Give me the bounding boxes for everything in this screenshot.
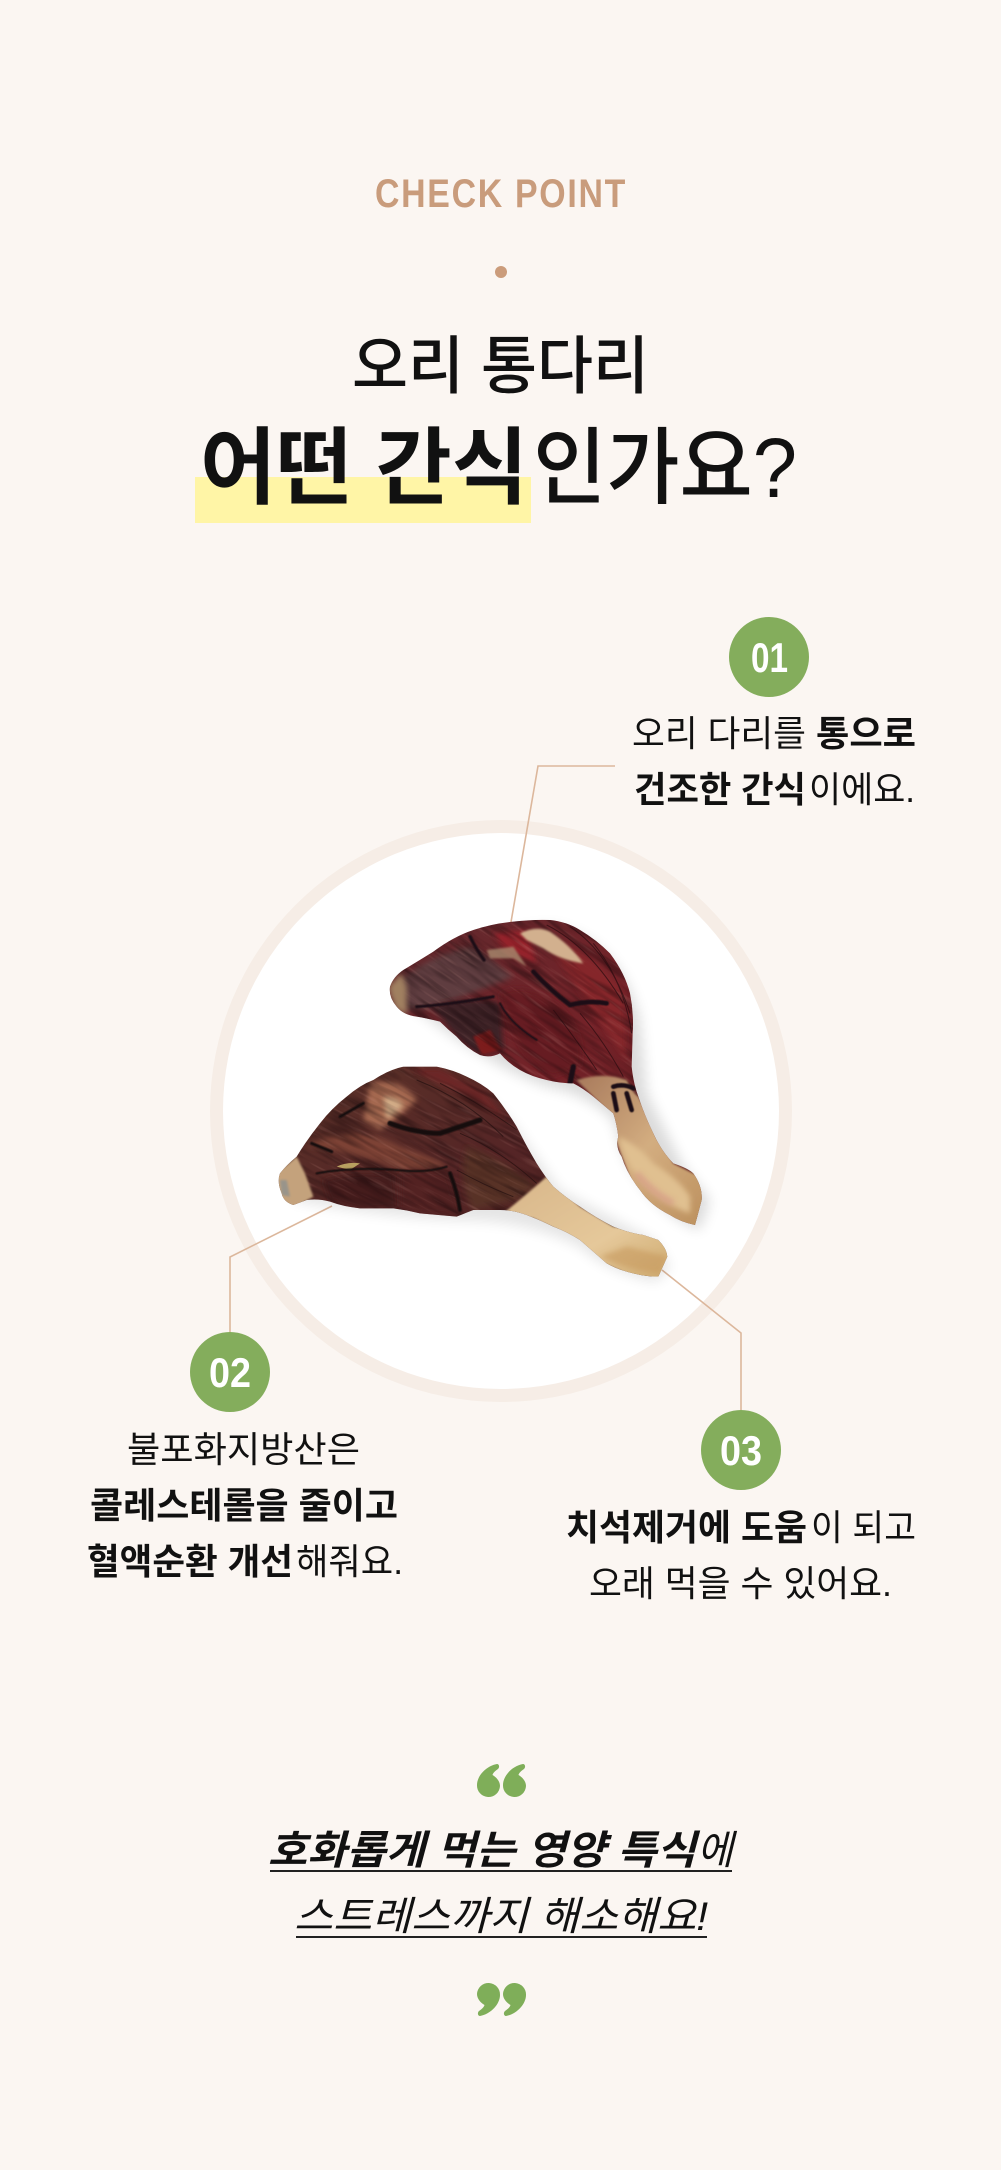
badge 03 (701, 1410, 781, 1490)
callout 03 text: 이 되고 (811, 1507, 916, 1548)
upper leg bone (577, 1076, 707, 1230)
icon: closing quote mark (477, 1983, 526, 2016)
callout 03 (566, 1410, 916, 1604)
header: check point (375, 172, 627, 278)
dark cracks and fibres (312, 1103, 480, 1210)
upper duck leg (390, 920, 702, 1225)
dark lower lobe (430, 1000, 503, 1055)
fat streak (520, 929, 583, 963)
leader lines (230, 766, 741, 1410)
quote line 2: 스트레스까지 해소해요! (294, 1895, 708, 1939)
callout 02 text: 불포화지방산은 (127, 1429, 360, 1470)
meat fibre texture (289, 1066, 621, 1230)
plate ring (210, 820, 792, 1402)
callout 02 text: 콜레스테롤을 줄이고 (90, 1485, 398, 1526)
callout 03 text: 치석제거에 도움 (566, 1507, 807, 1548)
meat highlights (500, 989, 581, 1077)
thigh top highlight (363, 1082, 417, 1130)
quote line 1: 에 (697, 1829, 738, 1873)
title line 2 regular: 인가요? (533, 421, 797, 515)
badge 01 (729, 617, 809, 697)
leader line 02 (230, 1206, 332, 1332)
product plate (210, 820, 792, 1402)
badge 01: 01 (751, 634, 788, 681)
knuckle (277, 1157, 313, 1208)
callout 02 (87, 1332, 403, 1582)
callout 03 text (566, 1507, 916, 1604)
title line 1: 오리 통다리 (352, 332, 649, 402)
knuckle (388, 973, 407, 1015)
callout 01 text: 통으로 (816, 713, 916, 754)
title highlight (195, 477, 531, 523)
grey brown left area (400, 947, 513, 1010)
callout 03 text: 오래 먹을 수 있어요. (589, 1563, 892, 1604)
leader line 01 (511, 766, 615, 922)
callout 01 text: 이에요. (809, 769, 915, 810)
meat fibre texture (398, 920, 700, 1217)
lower duck leg (278, 1066, 668, 1277)
closing quote block (268, 1764, 738, 2016)
eyebrow label: CHECK POINT (375, 172, 627, 216)
infographic page (88, 179, 914, 2016)
dot (495, 266, 507, 278)
callout 02 text (87, 1429, 403, 1582)
callout 01 text: 건조한 간식 (634, 769, 806, 810)
callout 02 text: 혈액순환 개선 (87, 1541, 293, 1582)
lower leg bone (503, 1177, 673, 1280)
dark cracks and fibres (417, 937, 633, 1110)
plate (223, 833, 779, 1389)
duck legs (278, 920, 712, 1282)
title (195, 332, 797, 523)
quote line 1: 호화롭게 먹는 영양 특식 (268, 1829, 700, 1873)
mottled muscle (310, 1134, 447, 1170)
leader line 03 (662, 1270, 741, 1410)
seam (337, 1163, 360, 1170)
callout 01 text: 오리 다리를 (632, 713, 806, 754)
badge 02 (190, 1332, 270, 1412)
icon: opening quote mark (477, 1764, 526, 1797)
shadow (293, 927, 710, 1282)
badge 02: 02 (209, 1349, 251, 1396)
callout 01 (632, 617, 916, 810)
badge 03: 03 (720, 1427, 762, 1474)
title line 2 bold: 어떤 간식 (200, 421, 528, 515)
callout 02 text: 해줘요. (296, 1541, 403, 1582)
callout 01 text (632, 713, 916, 810)
